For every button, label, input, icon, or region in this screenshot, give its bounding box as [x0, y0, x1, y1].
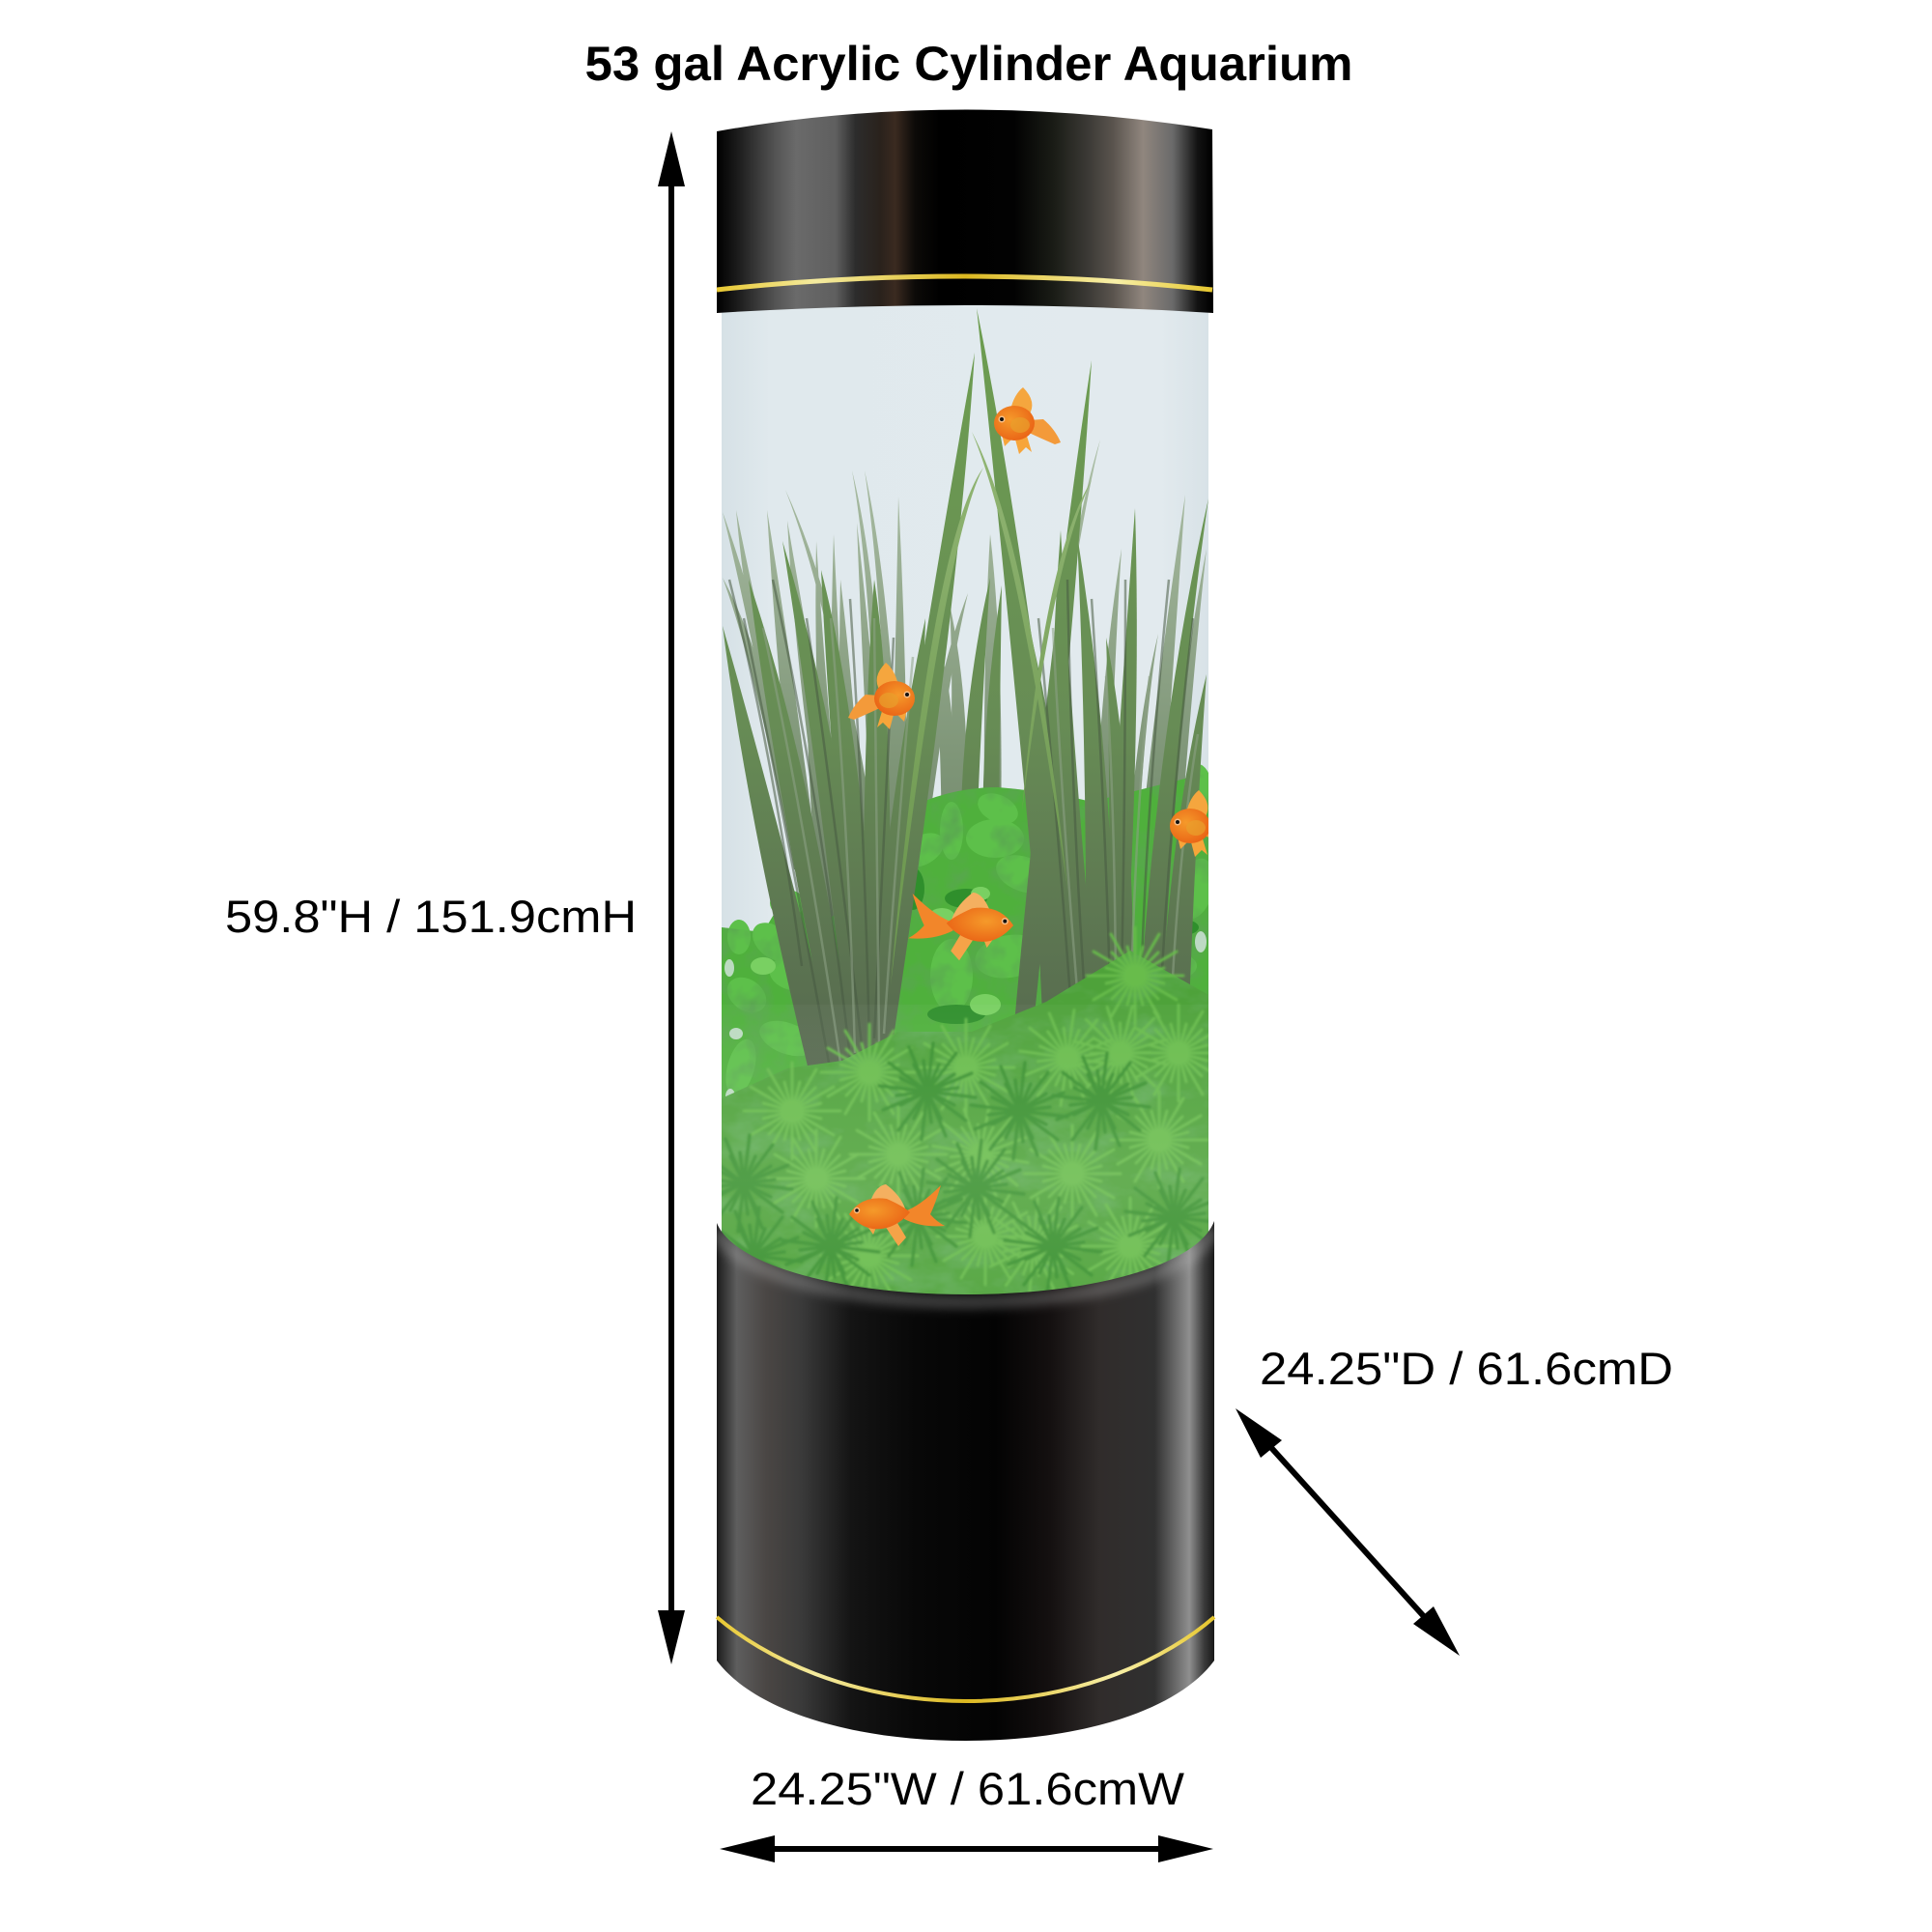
width arrow: [720, 1835, 1213, 1862]
height arrow: [658, 131, 685, 1664]
height label: 59.8"H / 151.9cmH: [225, 891, 637, 942]
depth arrow: [1236, 1408, 1460, 1656]
black top lid: [717, 109, 1213, 313]
black base: [717, 1221, 1214, 1741]
gold trim on lid: [717, 276, 1212, 290]
feathery foreground plant: [722, 925, 1208, 1294]
centre reed blades behind leaves: [962, 578, 1002, 790]
depth label: 24.25"D / 61.6cmD: [1260, 1343, 1673, 1394]
aquarium water column: [722, 305, 1208, 1294]
width label: 24.25"W / 61.6cmW: [751, 1763, 1185, 1814]
goldfish lower: [849, 1184, 945, 1246]
goldfish left: [848, 663, 915, 729]
round-leaf plant mass: [721, 764, 1221, 1121]
background reed blades: [723, 440, 1207, 918]
gold trim on base: [717, 1617, 1214, 1701]
title: 53 gal Acrylic Cylinder Aquarium: [585, 37, 1352, 91]
goldfish right edge: [1170, 790, 1208, 857]
bright slender blades: [891, 432, 1092, 985]
reed blade edge shading: [729, 580, 1198, 1063]
goldfish centre: [908, 893, 1013, 960]
front reed blades: [723, 308, 1208, 1082]
goldfish top: [994, 387, 1061, 454]
